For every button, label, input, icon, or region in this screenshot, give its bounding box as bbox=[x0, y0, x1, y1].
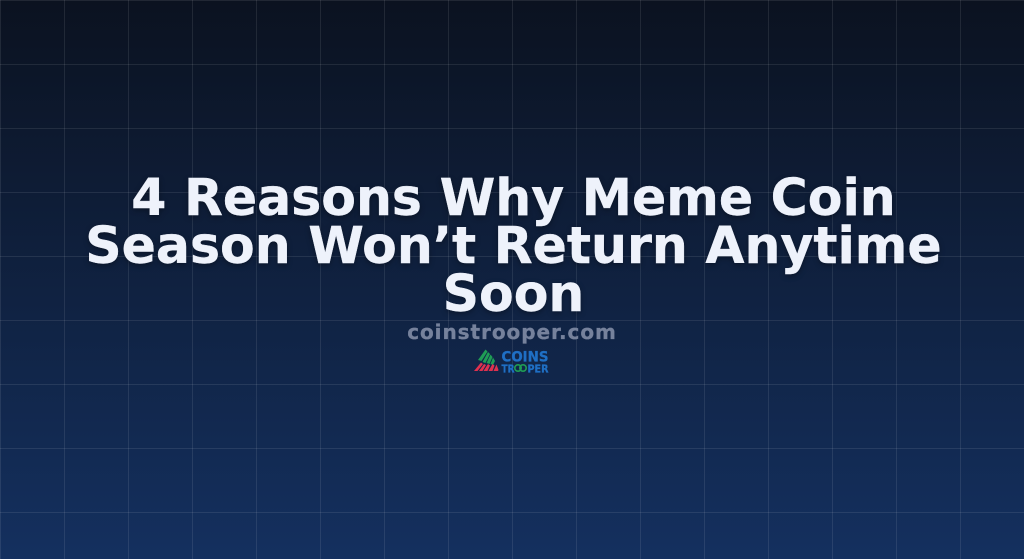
icon: Coins Trooper logo bbox=[474, 350, 548, 374]
website name: coinstrooper.com bbox=[407, 320, 617, 344]
logo mark: green and red rising stripes bbox=[474, 350, 498, 371]
logo wordmark bbox=[502, 350, 548, 376]
title bbox=[85, 168, 942, 322]
title: Season Won’t Return Anytime bbox=[85, 216, 942, 274]
logo wordmark: COINS bbox=[502, 350, 548, 366]
title: Soon bbox=[443, 264, 584, 322]
title: 4 Reasons Why Meme Coin bbox=[131, 168, 896, 226]
